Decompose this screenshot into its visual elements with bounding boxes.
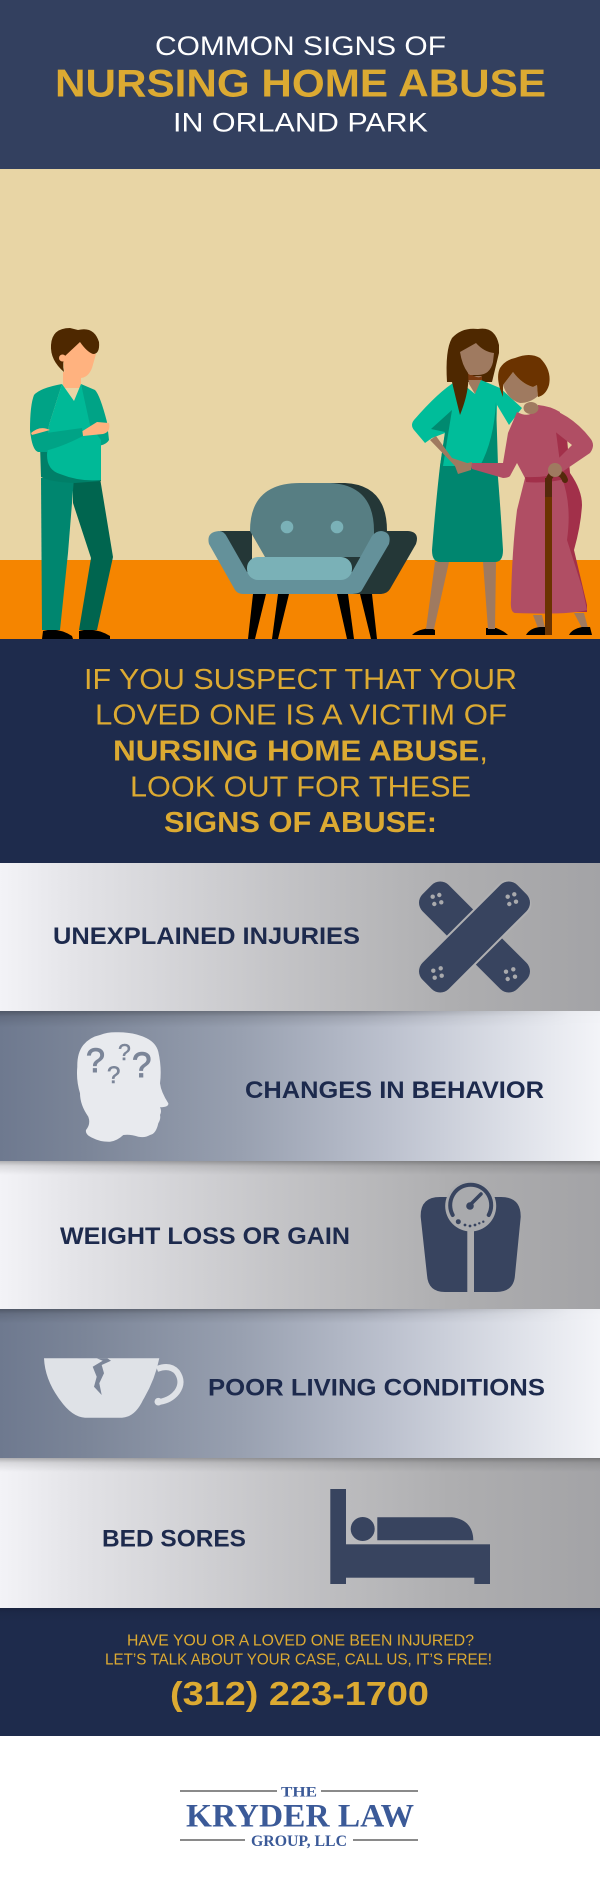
icon: crossed bandages: [413, 875, 536, 999]
icon: head with question marks: [77, 1032, 168, 1142]
intro line 5: SIGNS OF ABUSE:: [164, 807, 437, 839]
icon: person in bed: [330, 1489, 490, 1584]
icon: head with question marks: ?: [86, 1042, 105, 1080]
sign band: changes in behavior: [0, 1011, 600, 1161]
sign band: weight loss or gain: [0, 1161, 600, 1309]
illustration: armchair: [208, 483, 417, 639]
illustration: elderly woman with cane: [455, 355, 593, 635]
title line: in orland park: IN ORLAND PARK: [173, 108, 428, 138]
sign band: bed sores: [0, 1458, 600, 1608]
intro line 2: LOVED ONE IS A VICTIM OF: [95, 700, 507, 732]
icon: head with question marks: ?: [132, 1046, 151, 1085]
illustration panel: room with caregivers and chair: [0, 169, 600, 639]
label: bed sores: BED SORES: [102, 1526, 246, 1553]
label: weight loss or gain: WEIGHT LOSS OR GAIN: [60, 1223, 350, 1250]
title line: nursing home abuse: NURSING HOME ABUSE: [55, 63, 546, 106]
sign band: poor living conditions: [0, 1309, 600, 1458]
label: unexplained injuries: UNEXPLAINED INJURIES: [53, 923, 360, 950]
label: changes in behavior: CHANGES IN BEHAVIOR: [245, 1077, 544, 1104]
phone number: (312) 223-1700: [170, 1675, 429, 1712]
logo: the kryder law group: GROUP, LLC: [251, 1833, 347, 1850]
intro line 1: IF YOU SUSPECT THAT YOUR: [84, 664, 517, 696]
icon: cracked cup: [44, 1358, 180, 1418]
footer call to action panel: [0, 1608, 600, 1736]
call to action line 2: LET’S TALK ABOUT YOUR CASE, CALL US, IT’S FREE!: [105, 1651, 492, 1668]
intro line 4: LOOK OUT FOR THESE: [130, 772, 471, 804]
icon: head with question marks: ?: [118, 1039, 131, 1065]
white footer background: [0, 1736, 600, 1895]
sign band: unexplained injuries: [0, 863, 600, 1011]
icon: bathroom scale: [421, 1180, 521, 1292]
title line: common signs of: COMMON SIGNS OF: [155, 31, 446, 61]
illustration: male nurse: [30, 328, 113, 639]
logo: the kryder law group: THE: [281, 1785, 317, 1801]
logo: the kryder law group: [180, 1785, 418, 1850]
icon: head with question marks: ?: [107, 1062, 120, 1089]
intro panel: [0, 639, 600, 863]
header panel: [0, 0, 600, 169]
illustration: female caregiver: [412, 329, 522, 635]
logo: the kryder law group: KRYDER LAW: [186, 1799, 414, 1835]
intro line 3: NURSING HOME ABUSE ,: [113, 736, 488, 768]
call to action line 1: HAVE YOU OR A LOVED ONE BEEN INJURED?: [127, 1632, 474, 1649]
label: poor living conditions: POOR LIVING CONDITIONS: [208, 1375, 545, 1402]
